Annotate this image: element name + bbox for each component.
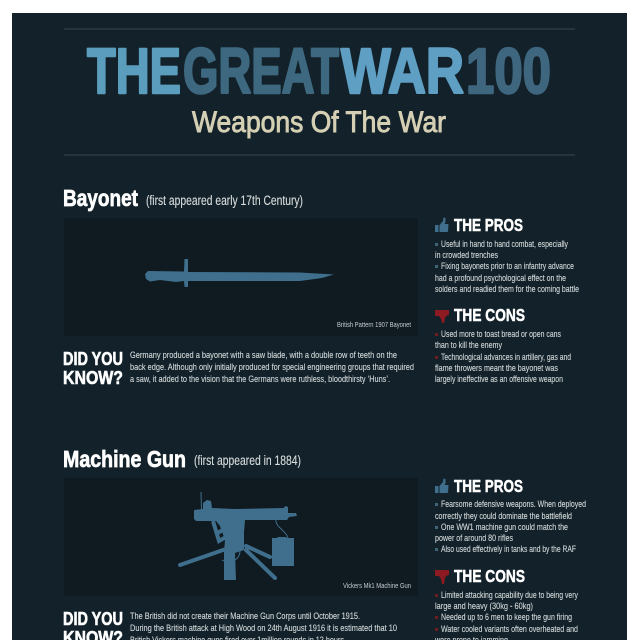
icon: machine gun silhouette bbox=[180, 492, 297, 580]
did you know text: Germany produced a bayonet with a saw blade, with a double row of teeth on the bbox=[130, 350, 397, 360]
cons list: largely ineffective as an offensive weapon bbox=[435, 374, 563, 384]
pros list: Fixing bayonets prior to an infantry advance bbox=[441, 261, 574, 271]
bayonet date: (first appeared early 17th Century) bbox=[146, 193, 303, 208]
caption: machine gun: Vickers Mk1 Machine Gun bbox=[343, 583, 411, 590]
icon: thumbs down bbox=[435, 570, 449, 584]
cons list: Technological advances in artillery, gas and bbox=[441, 352, 571, 362]
section: machine gun bbox=[63, 446, 418, 640]
image panel: machine gun bbox=[64, 478, 418, 596]
cons: machine gun bbox=[434, 566, 578, 640]
pros list: in crowded trenches bbox=[435, 250, 498, 260]
cons list: than to kill the enemy bbox=[435, 340, 502, 350]
icon: thumbs down bbox=[435, 310, 449, 323]
pros list: power of around 80 rifles bbox=[435, 533, 513, 543]
cons list bbox=[435, 329, 571, 384]
did you know heading: KNOW? bbox=[63, 367, 123, 388]
did you know text bbox=[130, 611, 397, 640]
machine gun date: (first appeared in 1884) bbox=[194, 453, 301, 468]
heading: the pros: THE PROS bbox=[454, 215, 523, 235]
title bbox=[87, 35, 551, 107]
did you know text: a saw, it added to the vision that the Germans were ruthless, bloodthirsty ‘Huns’. bbox=[130, 374, 390, 384]
title: WAR bbox=[341, 35, 464, 107]
icon: thumbs up bbox=[435, 218, 448, 232]
did you know text: During the British attack at High Wood on 24th August 1916 it is estimated that 10 bbox=[130, 623, 397, 633]
cons: bayonet bbox=[435, 305, 571, 384]
pros list bbox=[435, 239, 579, 294]
section: bayonet bbox=[63, 185, 418, 388]
did you know heading: DID YOU bbox=[63, 608, 123, 629]
did you know heading bbox=[63, 348, 123, 388]
heading: bayonet: Bayonet bbox=[63, 185, 138, 211]
subtitle: Weapons Of The War bbox=[192, 106, 446, 139]
caption: bayonet: British Pattern 1907 Bayonet bbox=[337, 322, 411, 329]
heading: the pros: THE PROS bbox=[454, 476, 523, 496]
heading: the cons: THE CONS bbox=[454, 566, 525, 586]
icon: bayonet silhouette bbox=[145, 259, 334, 287]
pros list: Fearsome defensive weapons. When deployed bbox=[441, 499, 586, 509]
heading: machine gun: Machine Gun bbox=[63, 446, 186, 472]
image panel: bayonet bbox=[64, 218, 418, 336]
did you know heading bbox=[63, 608, 123, 640]
cons list: large and heavy (30kg - 60kg) bbox=[435, 601, 533, 611]
pros: bayonet bbox=[435, 215, 579, 294]
cons list: Used more to toast bread or open cans bbox=[441, 329, 561, 339]
icon: thumbs up bbox=[435, 478, 448, 493]
cons list: Limited attacking capability due to being very bbox=[441, 590, 578, 600]
heading: the cons: THE CONS bbox=[454, 305, 525, 325]
cons list: flame throwers meant the bayonet was bbox=[435, 363, 558, 373]
pros list: Useful in hand to hand combat, especially bbox=[441, 239, 568, 249]
cons list: Needed up to 6 men to keep the gun firing bbox=[441, 612, 572, 622]
cons list: Water cooled variants often overheated and bbox=[441, 624, 578, 634]
did you know heading: DID YOU bbox=[63, 348, 123, 369]
pros: machine gun bbox=[435, 476, 586, 554]
did you know text: The British did not create their Machine Gun Corps until October 1915. bbox=[130, 611, 360, 621]
did you know text: back edge. Although only initially produced for special engineering groups that required bbox=[130, 362, 414, 372]
pros list: had a profound psychological effect on the bbox=[435, 273, 566, 283]
cons list bbox=[434, 590, 578, 640]
pros list: One WW1 machine gun could match the bbox=[441, 522, 568, 532]
pros list bbox=[435, 499, 586, 554]
pros list: Also used effectively in tanks and by the RAF bbox=[441, 544, 576, 554]
title: THE bbox=[87, 35, 181, 107]
pros list: correctly they could dominate the battlefield bbox=[435, 511, 572, 521]
title: 100 bbox=[466, 35, 551, 107]
pros list: solders and readied them for the coming battle bbox=[435, 284, 579, 294]
did you know text bbox=[130, 350, 414, 384]
title: GREAT bbox=[183, 35, 339, 107]
